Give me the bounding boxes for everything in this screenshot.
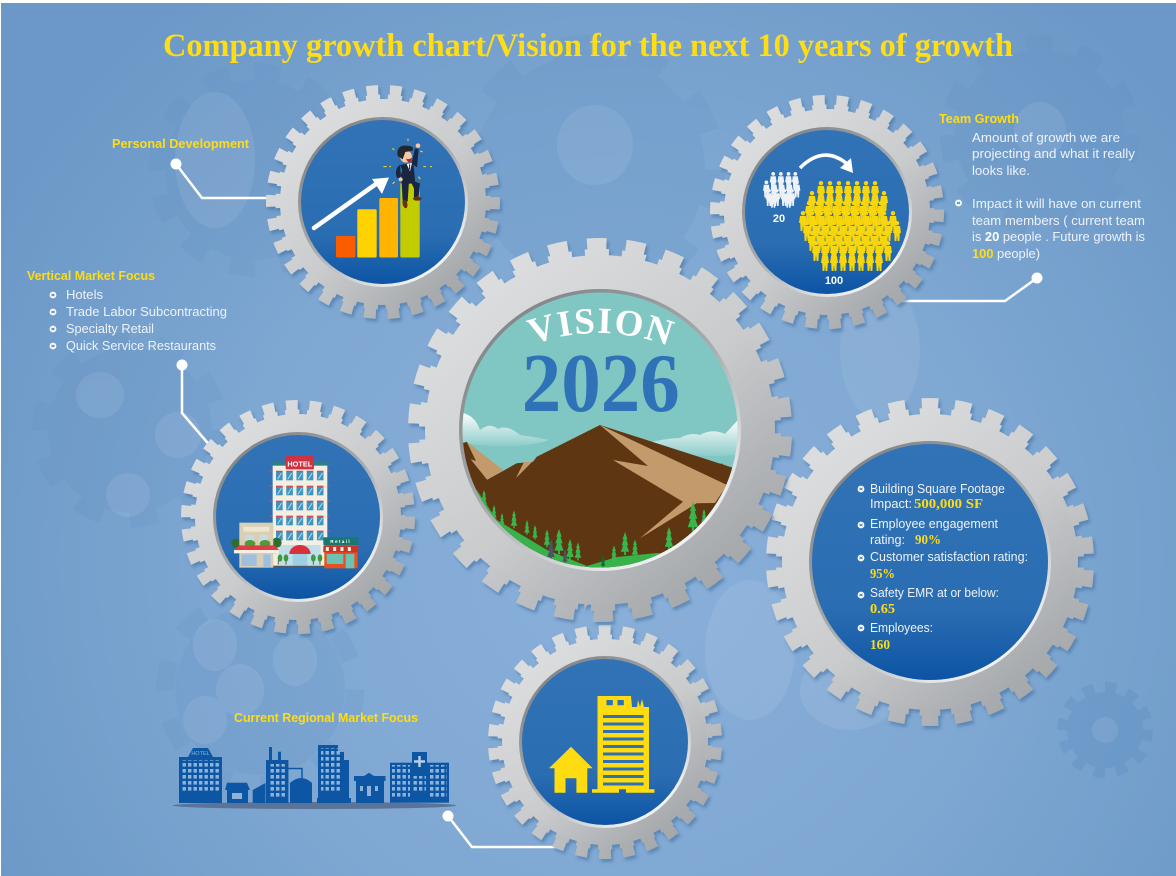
mountain scene	[462, 292, 738, 568]
factory	[253, 747, 312, 803]
label: personal development: Personal Development	[112, 136, 250, 151]
text: team growth: is 20 people . Future growth is	[972, 229, 1145, 244]
metrics list: Safety EMR at or below:	[870, 585, 999, 600]
text: vertical market focus: Quick Service Restaurants	[66, 338, 216, 353]
connector: team growth	[900, 272, 1042, 301]
shop	[225, 783, 250, 803]
hotel building	[179, 748, 222, 803]
metrics list: Impact:	[870, 496, 912, 511]
heading: 2026: 2026	[522, 337, 680, 430]
clouds	[460, 412, 738, 456]
text: vertical market focus: Vertical Market Focus	[27, 268, 155, 283]
growth arrow	[314, 178, 389, 228]
text: team growth: Amount of growth we are	[972, 130, 1120, 145]
background gears	[40, 43, 1132, 785]
label: 20: 20	[773, 213, 785, 225]
hotel building: HOTEL	[191, 751, 210, 757]
gear: vertical market	[189, 408, 407, 626]
gear: regional market	[490, 627, 720, 857]
metrics list: 160	[870, 638, 890, 653]
metrics list: 500,000 SF	[914, 497, 983, 512]
hospital	[390, 752, 449, 803]
text: team growth: Team Growth	[939, 111, 1019, 126]
metrics list: Employees:	[870, 620, 933, 635]
metrics list: 0.65	[870, 602, 895, 617]
connector: personal development	[170, 158, 270, 198]
tower	[317, 745, 351, 803]
icon: hotel and shops	[231, 456, 358, 568]
text: team growth	[939, 111, 1145, 261]
grass	[475, 488, 662, 568]
text: vertical market focus: Hotels	[66, 287, 103, 302]
main mountain	[475, 425, 732, 568]
gear: team growth	[716, 101, 938, 323]
connector: regional market	[442, 810, 558, 847]
text: team growth: projecting and what it really	[972, 146, 1136, 161]
text: team growth: Impact it will have on current	[972, 196, 1141, 211]
icon: team of 20	[763, 172, 800, 208]
icon: team of 100	[799, 181, 901, 271]
icon: house	[549, 747, 593, 793]
icon: businessman	[383, 139, 432, 209]
trees	[481, 490, 707, 563]
text: vertical market focus: Trade Labor Subcontracting	[66, 304, 227, 319]
text: vertical market focus	[27, 268, 227, 353]
label: regional market focus: Current Regional Market Focus	[234, 710, 418, 725]
metrics list: 95%	[870, 567, 895, 582]
gear: vision 2026	[408, 238, 795, 628]
text: vertical market focus: Specialty Retail	[66, 321, 154, 336]
metrics list: rating:	[870, 532, 905, 547]
text: team growth: looks like.	[972, 163, 1030, 178]
curved arrow	[800, 155, 853, 173]
heading: vision: VISION	[526, 308, 676, 345]
bar chart	[336, 183, 420, 258]
city skyline	[172, 745, 456, 809]
icon: office tower	[592, 696, 654, 793]
metrics list	[858, 481, 1028, 653]
metrics list: 90%	[915, 533, 941, 548]
icon: hotel and shops: Retail	[330, 539, 351, 544]
connector: vertical market	[176, 360, 212, 448]
gear: personal development	[270, 89, 496, 315]
gear: building metrics	[767, 399, 1093, 725]
icon: hotel and shops: HOTEL	[287, 459, 313, 468]
house	[354, 773, 386, 803]
title: Company growth chart/Vision for the next 10 years of growth	[163, 28, 1013, 64]
background gear bottom right	[1062, 687, 1148, 773]
text: team growth: team members ( current team	[972, 213, 1145, 228]
right peak	[721, 463, 732, 487]
label: 100: 100	[825, 275, 843, 287]
metrics list: Employee engagement	[870, 516, 998, 531]
text: team growth: 100 people)	[972, 246, 1040, 261]
metrics list: Customer satisfaction rating:	[870, 549, 1028, 564]
left peak	[467, 442, 503, 480]
metrics list: Building Square Footage	[870, 481, 1005, 496]
